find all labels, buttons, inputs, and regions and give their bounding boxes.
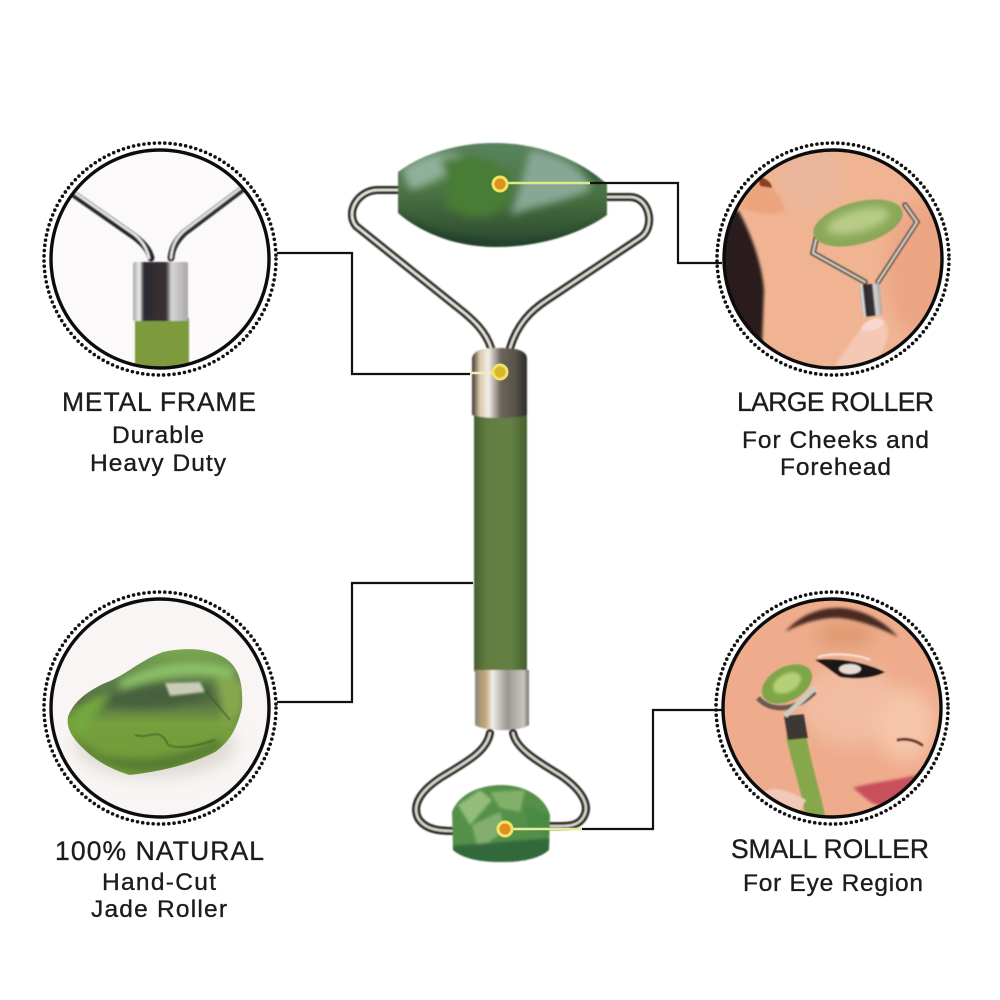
connector: natural jade: [277, 583, 473, 702]
label: large roller: [737, 387, 934, 481]
callout connector lines: [277, 183, 722, 829]
label: natural jade: 100% NATURAL: [55, 836, 264, 866]
label: natural jade: Hand-Cut: [102, 869, 216, 896]
large roller: [395, 140, 610, 250]
panel: natural jade stone circle: [44, 592, 276, 824]
label: large roller: LARGE ROLLER: [737, 387, 934, 417]
bottom collar: [475, 670, 529, 730]
label: large roller: For Cheeks and: [742, 427, 929, 454]
marker: metal frame collar: [470, 365, 507, 379]
metal frame wires, large end: [352, 190, 649, 348]
top collar: [472, 348, 527, 418]
label: large roller: Forehead: [780, 454, 891, 481]
metal frame wires, small end: [416, 733, 586, 831]
label: natural jade: Jade Roller: [91, 896, 227, 923]
connector: small roller: [582, 710, 722, 829]
connector: large roller: [590, 183, 722, 263]
connector: metal frame: [277, 253, 470, 374]
handle: [474, 408, 527, 672]
panel: metal frame circle: [44, 143, 276, 375]
panel: large roller on cheek circle: [715, 140, 965, 375]
label: small roller: For Eye Region: [743, 870, 923, 897]
label: small roller: SMALL ROLLER: [731, 834, 929, 864]
marker: large roller: [493, 177, 590, 191]
marker: small roller: [498, 822, 582, 836]
panel: small roller on eye circle: [716, 592, 948, 824]
label: small roller: [731, 834, 929, 897]
label: metal frame: METAL FRAME: [62, 387, 256, 417]
label: natural jade: [55, 836, 264, 923]
product: jade roller: [352, 140, 649, 865]
small roller: [450, 783, 552, 865]
label: metal frame: Durable: [112, 422, 204, 449]
label: metal frame: Heavy Duty: [90, 450, 227, 477]
label: metal frame: [62, 387, 256, 477]
roller frame: [813, 205, 917, 282]
